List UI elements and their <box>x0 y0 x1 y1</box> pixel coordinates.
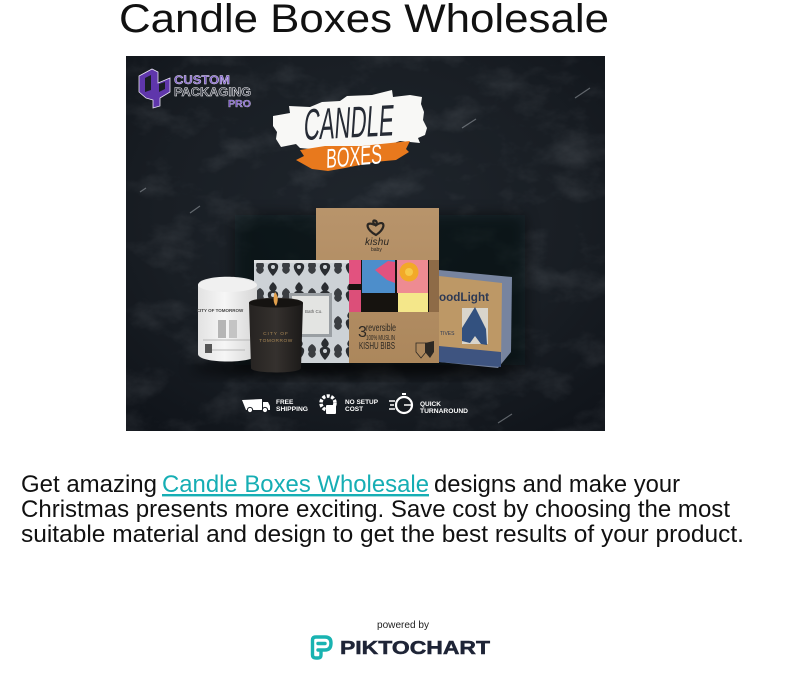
feature: no setup cost: COST <box>345 406 363 413</box>
body link: Candle Boxes Wholesale <box>162 471 429 498</box>
kraft box caption: reversible <box>366 323 396 334</box>
feature: quick turnaround <box>389 393 468 415</box>
product: damask box <box>254 260 349 363</box>
icon: Piktochart logo <box>312 637 331 658</box>
product: black candle: CITY OF <box>263 331 289 337</box>
product: kraft bib box <box>316 208 439 363</box>
logo: Custom Packaging Pro <box>139 69 251 110</box>
product: blue GoodLight box: oodLight <box>439 292 489 304</box>
product: damask box: Bath Co. <box>305 309 323 314</box>
kraft box caption: KISHU BIBS <box>359 341 395 352</box>
product: black candle: TOMORROW <box>259 338 293 344</box>
feature: no setup cost <box>321 396 379 414</box>
kraft box logo: kishu <box>365 237 389 248</box>
product: white cylinder: CITY OF TOMORROW <box>197 308 244 313</box>
kraft box caption <box>358 323 396 352</box>
product shadow <box>235 215 525 365</box>
kraft box caption: 100% MUSLIN <box>366 333 395 342</box>
kraft box logo: baby <box>371 247 382 253</box>
logo: Custom Packaging Pro: PACKAGING <box>174 87 251 99</box>
kraft box logo <box>365 221 389 253</box>
footer: powered by Piktochart: PIKTOCHART <box>340 637 491 658</box>
footer: powered by Piktochart: powered by <box>377 620 429 631</box>
logo: Custom Packaging Pro: PRO <box>228 99 251 110</box>
brush badge: Candle Boxes: BOXES <box>326 138 382 174</box>
product: black candle <box>249 292 303 372</box>
feature: free shipping: FREE <box>276 399 294 406</box>
product: blue GoodLight box: TIVES <box>440 331 455 337</box>
body paragraph <box>21 471 744 548</box>
brush badge: Candle Boxes: CANDLE <box>302 96 396 150</box>
footer: powered by Piktochart <box>312 620 491 658</box>
hero image: candle boxes banner <box>126 56 605 431</box>
brush badge: Candle Boxes <box>273 90 427 174</box>
body paragraph: Christmas presents more exciting. Save cost by choosing the most <box>21 496 730 523</box>
feature: quick turnaround: TURNAROUND <box>420 408 468 415</box>
feature: free shipping: SHIPPING <box>276 406 308 413</box>
feature: free shipping <box>242 399 308 413</box>
body paragraph: Get amazing <box>21 471 157 498</box>
feature: quick turnaround: QUICK <box>420 401 441 408</box>
body paragraph: suitable material and design to get the best results of your product. <box>21 521 744 548</box>
kraft box caption: 3 <box>358 324 367 341</box>
feature: no setup cost: NO SETUP <box>345 399 379 406</box>
product: blue GoodLight box <box>439 270 512 368</box>
product: white cylinder <box>197 277 257 362</box>
logo: Custom Packaging Pro: CUSTOM <box>174 75 230 87</box>
body paragraph: designs and make your <box>434 471 680 498</box>
